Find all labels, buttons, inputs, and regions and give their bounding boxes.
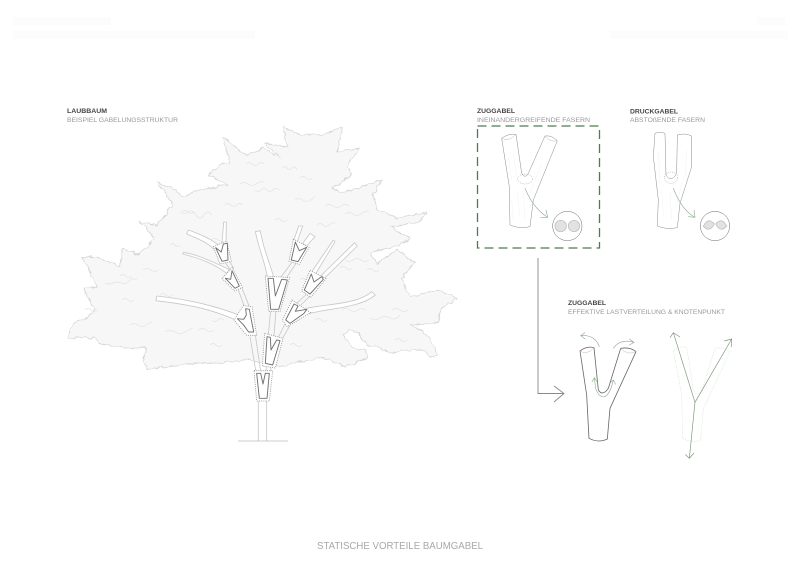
branches (156, 222, 375, 441)
diagram: Druckgabel fork with detail (653, 132, 730, 241)
heading: Laubbaum: BEISPIEL GABELUNGSSTRUKTUR (67, 117, 178, 124)
diagram: fork with force arrows (580, 333, 636, 441)
diagram: load vectors (670, 333, 732, 458)
ground line (238, 440, 288, 442)
footer caption: STATISCHE VORTEILE BAUMGABEL (317, 541, 483, 552)
heading: Laubbaum: LAUBBAUM (67, 108, 108, 115)
heading: Zuggabel interlocking fibres: ZUGGABEL (477, 108, 515, 115)
heading: Zuggabel load distribution: EFFEKTIVE LASTVERTEILUNG & KNOTENPUNKT (568, 309, 725, 316)
heading: Druckgabel (630, 108, 705, 124)
canopy (68, 127, 457, 370)
tree illustration (68, 127, 457, 441)
faint header left (illegible in reference) (13, 17, 255, 39)
heading: Zuggabel load distribution: ZUGGABEL (568, 300, 606, 307)
heading: Zuggabel interlocking fibres (477, 108, 590, 124)
faint header right (illegible in reference) (610, 17, 788, 39)
heading: Zuggabel interlocking fibres: INEINANDERGREIFENDE FASERN (477, 117, 590, 124)
structural forks (213, 239, 326, 401)
heading: Laubbaum (67, 108, 178, 124)
heading: Druckgabel: DRUCKGABEL (630, 108, 678, 116)
heading: Druckgabel: ABSTOßENDE FASERN (630, 117, 705, 124)
connector arrow (538, 258, 564, 402)
canopy texture squiggles (85, 162, 408, 346)
dashed green highlight frame (478, 126, 600, 248)
heading: Zuggabel load distribution (568, 300, 725, 316)
diagram: Zuggabel fork with detail (502, 134, 582, 241)
